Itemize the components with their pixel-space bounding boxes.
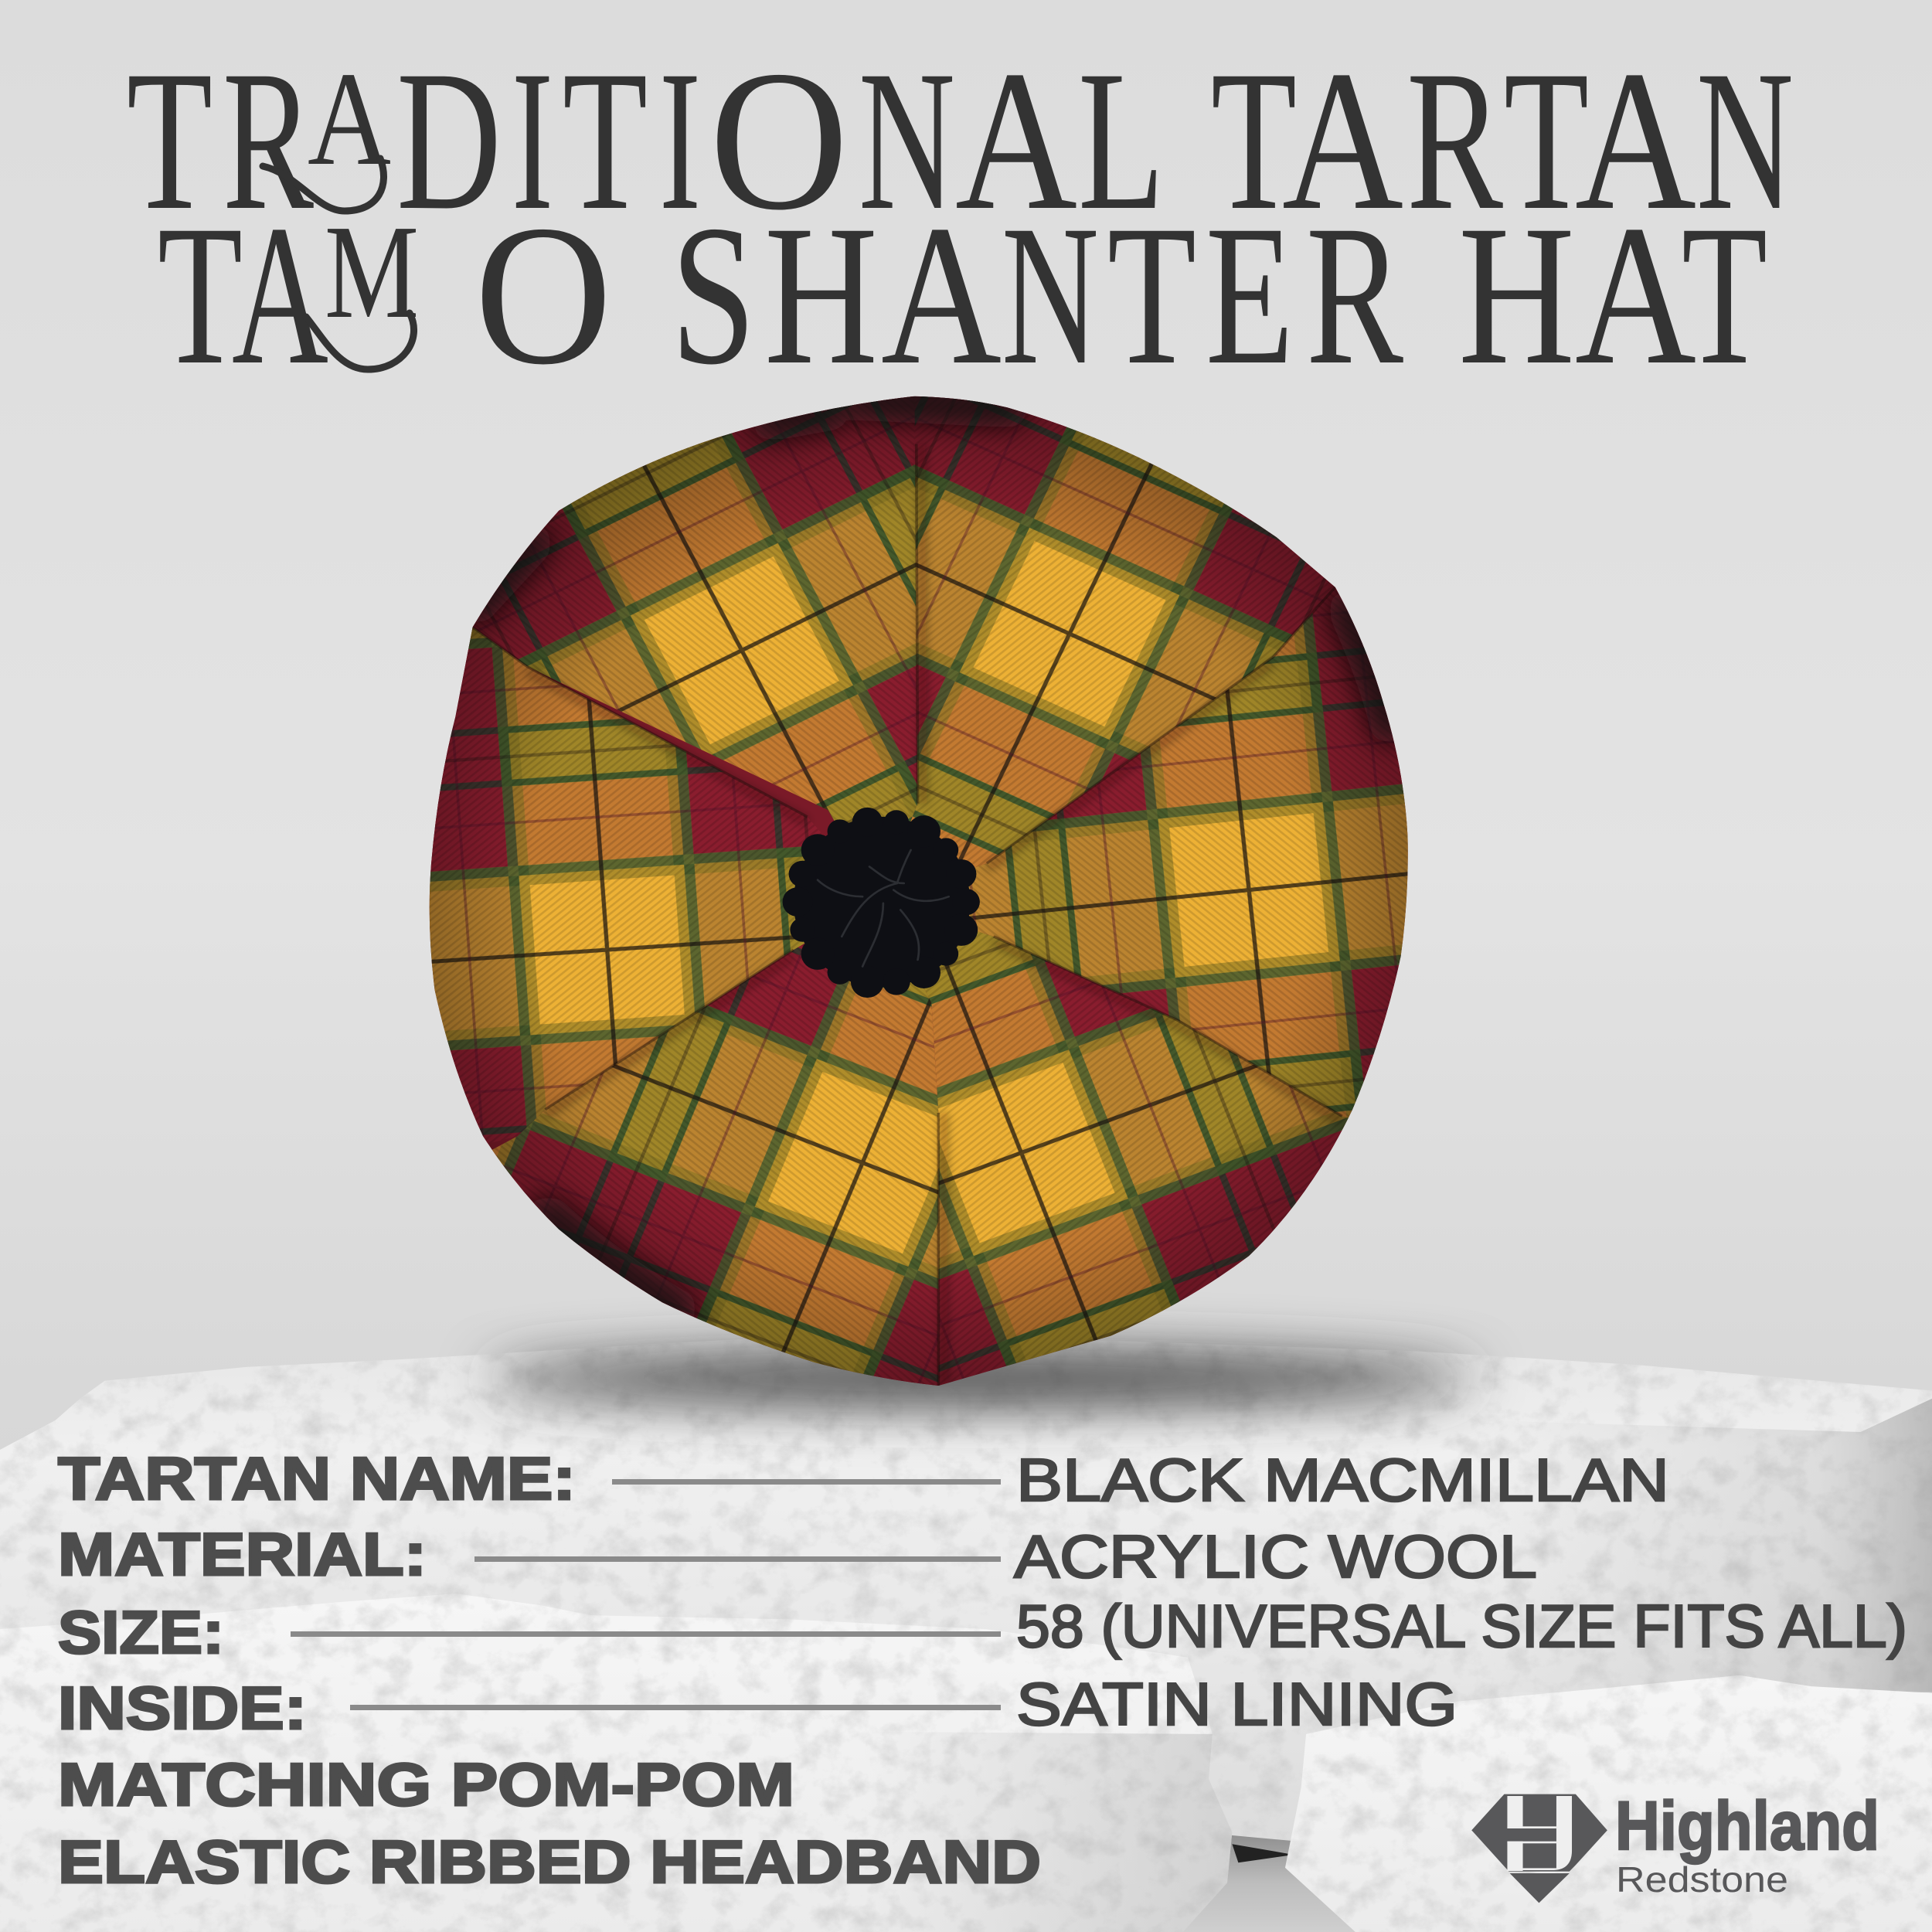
- title line 1: T: [563, 29, 648, 252]
- title line 2: S: [671, 184, 756, 406]
- label: inside: INSIDE:: [58, 1674, 307, 1742]
- title line 2: H: [764, 184, 878, 406]
- label: tartan name: TARTAN NAME:: [58, 1444, 576, 1512]
- connector lines: [291, 1479, 1001, 1710]
- title line 1: A: [1575, 29, 1696, 252]
- panel: top left: [473, 396, 918, 823]
- tartan panels: [430, 396, 1408, 1386]
- panel: left: [430, 628, 823, 1144]
- spec labels: [58, 1444, 1041, 1896]
- title line 2: A: [881, 184, 1002, 406]
- title line 1: A: [308, 44, 391, 193]
- title line 1: A: [1282, 29, 1403, 252]
- title line 2: T: [1682, 184, 1767, 406]
- title line 2: A: [1575, 184, 1696, 406]
- back rock: [0, 1339, 1932, 1842]
- hat shadow: [487, 1352, 1476, 1405]
- title line 1: T: [1504, 29, 1589, 252]
- fold lines: [473, 444, 1342, 1386]
- title line 1: I: [512, 29, 553, 252]
- label: size: SIZE:: [58, 1598, 224, 1666]
- title line 1: N: [1696, 29, 1794, 252]
- title line 2: O: [474, 184, 612, 406]
- logo: [1471, 1787, 1879, 1903]
- title line 2: E: [1206, 184, 1294, 406]
- title line 1: R: [1406, 29, 1504, 252]
- stone plinths: [0, 1339, 1932, 1932]
- title line 2: A: [232, 184, 328, 406]
- title line 1: O: [709, 29, 849, 252]
- shadow sliver: [1232, 1844, 1294, 1862]
- value: tartan name: BLACK MACMILLAN: [1016, 1446, 1669, 1514]
- title line 1: T: [1211, 29, 1297, 252]
- pom-pom: [783, 808, 980, 998]
- front right rock: [1285, 1675, 1932, 1932]
- logo mark: [1471, 1794, 1607, 1903]
- logo sub-wordmark: Redstone: [1616, 1859, 1788, 1900]
- panel: top right: [910, 396, 1335, 867]
- title line 2: T: [158, 184, 243, 406]
- title: [127, 29, 1794, 406]
- spec values: [1014, 1446, 1907, 1738]
- dark fabric shadows: [476, 401, 1390, 1309]
- title line 2: T: [1107, 184, 1196, 406]
- rim shading: [430, 396, 1408, 1386]
- title line 2: R: [1306, 184, 1404, 406]
- feature: matching pom-pom: MATCHING POM-POM: [58, 1750, 794, 1818]
- title line 1: N: [859, 29, 955, 252]
- logo wordmark: Highland: [1615, 1787, 1879, 1864]
- title line 1: D: [396, 29, 502, 252]
- label: material: MATERIAL:: [58, 1520, 427, 1588]
- value: size: 58 (UNIVERSAL SIZE FITS ALL): [1016, 1592, 1907, 1660]
- title swashes: [263, 158, 414, 369]
- floor between rocks: [1158, 1834, 1405, 1932]
- feature: elastic ribbed headband: ELASTIC RIBBED HEADBAND: [58, 1828, 1041, 1896]
- value: material: ACRYLIC WOOL: [1014, 1522, 1537, 1590]
- panel: right: [969, 587, 1408, 1120]
- title line 1: L: [1078, 29, 1159, 252]
- title line 1: T: [127, 29, 213, 252]
- panel: bottom left: [492, 944, 938, 1386]
- fold shadows: [528, 444, 1342, 1386]
- title line 2: M: [325, 197, 419, 346]
- title line 1: I: [659, 29, 701, 252]
- front left rock: [0, 1594, 1232, 1932]
- panel: bottom right: [924, 931, 1349, 1386]
- title line 1: A: [955, 29, 1077, 252]
- title line 1: R: [223, 29, 315, 252]
- hat: [430, 396, 1408, 1386]
- value: inside: SATIN LINING: [1016, 1670, 1458, 1738]
- hat base: [430, 396, 1408, 1386]
- title line 2: H: [1458, 184, 1575, 406]
- title line 2: N: [1002, 184, 1099, 406]
